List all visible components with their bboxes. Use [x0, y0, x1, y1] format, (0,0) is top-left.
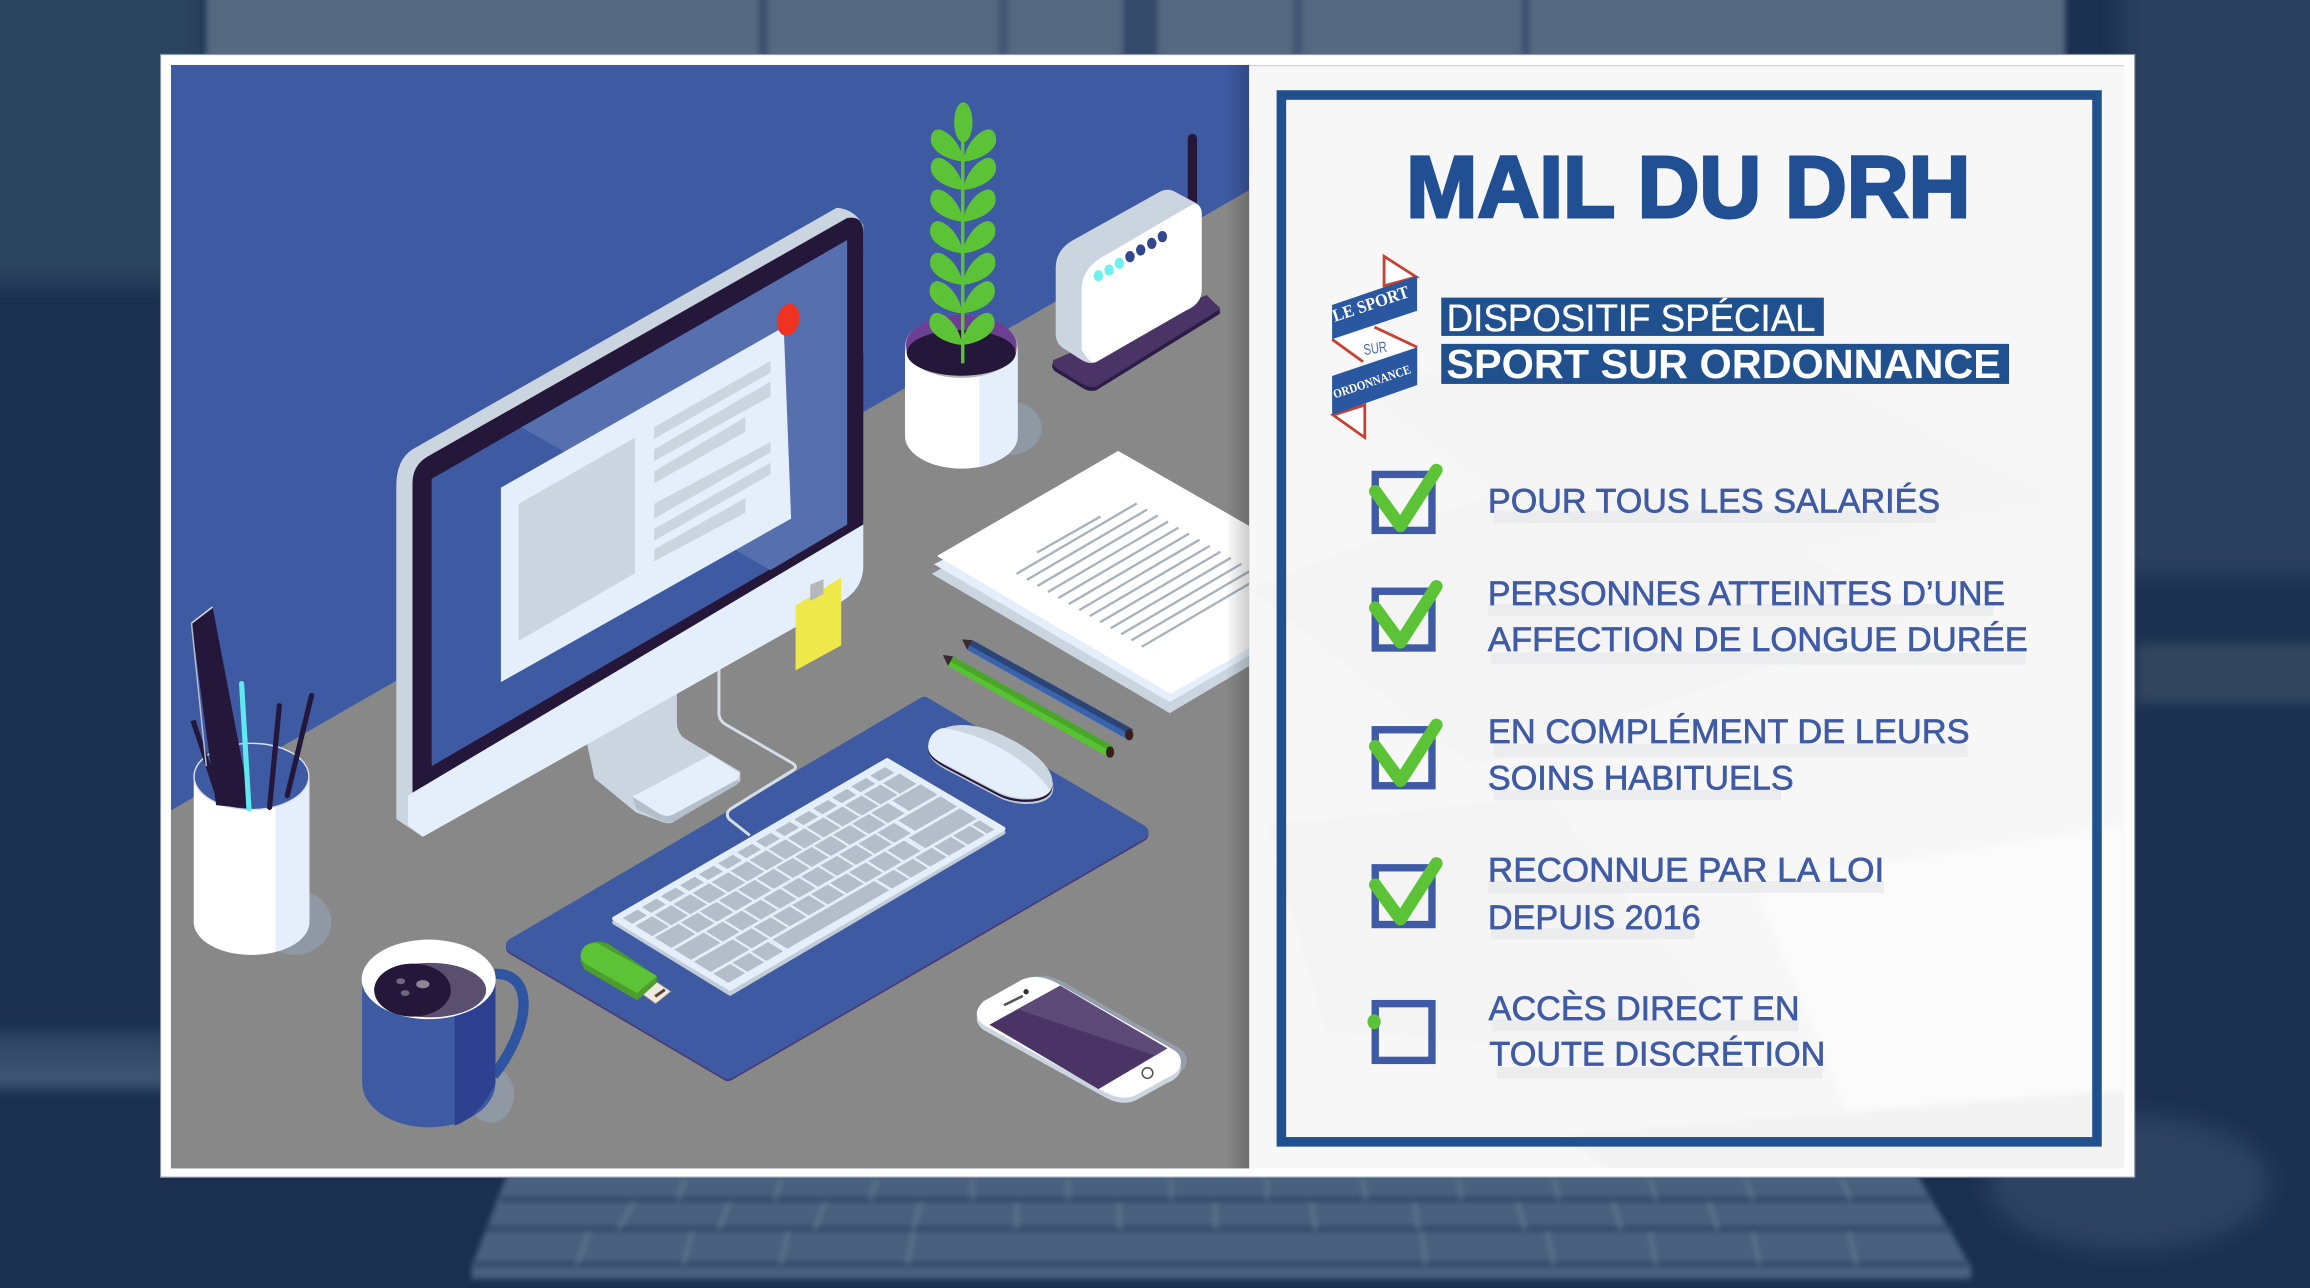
list item: personnes atteintes — [1375, 575, 2028, 664]
list item: personnes atteintes: PERSONNES ATTEINTES D’UNE — [1488, 575, 2005, 613]
monitor shell — [396, 208, 863, 837]
sticky note — [796, 578, 841, 670]
list item: en complément: EN COMPLÉMENT DE LEURS — [1488, 713, 1970, 751]
logo: le sport sur ordonnance ribbon: LE SPORT — [1330, 281, 1412, 326]
shadow cast by the paper — [1230, 65, 1250, 1168]
icon: pencils — [943, 639, 1133, 758]
list item: pour tous les salariés: POUR TOUS LES SALARIÉS — [1488, 483, 1940, 521]
icon: coffee mug — [362, 940, 524, 1127]
list item: accès direct: ACCÈS DIRECT EN — [1489, 990, 1800, 1028]
icon: desk mat — [513, 704, 1141, 1074]
list item: pour tous les salariés — [1375, 470, 1940, 530]
icon: computer monitor — [396, 208, 863, 837]
screen reflection — [522, 240, 847, 570]
icon: mouse — [928, 725, 1053, 804]
list item: accès direct: TOUTE DISCRÉTION — [1489, 1036, 1825, 1074]
icon: stack of papers — [932, 451, 1262, 713]
window on screen — [501, 302, 802, 682]
list item: accès direct — [1367, 990, 1825, 1078]
monitor bezel — [412, 218, 863, 793]
wall — [171, 65, 1249, 1168]
logo: le sport sur ordonnance ribbon — [1330, 256, 1417, 438]
white card — [161, 55, 2135, 1177]
screen — [432, 240, 847, 766]
icon: keyboard — [614, 760, 1003, 993]
panel: isometric desk illustration — [171, 65, 1262, 1168]
monitor stand — [588, 690, 740, 822]
list item: personnes atteintes: AFFECTION DE LONGUE DURÉE — [1488, 621, 2028, 659]
logo: le sport sur ordonnance ribbon: SUR — [1362, 339, 1388, 359]
icon: potted plant — [905, 102, 1042, 469]
list item: en complément — [1375, 713, 1970, 800]
panel: crumpled paper — [1249, 65, 2124, 1168]
icon: pen holder — [192, 607, 331, 955]
desk surface — [171, 190, 1249, 1168]
cable loop on mat — [727, 771, 793, 835]
cable — [718, 669, 797, 812]
list item: reconnue par la loi: RECONNUE PAR LA LOI — [1488, 852, 1884, 890]
list item: en complément: SOINS HABITUELS — [1488, 760, 1794, 798]
subtitle banner: sport sur ordonnance: SPORT SUR ORDONNANCE — [1446, 341, 2001, 387]
icon: smartphone — [977, 976, 1187, 1103]
subtitle banner: dispositif spécial: DISPOSITIF SPÉCIAL — [1447, 297, 1816, 340]
monitor chin — [408, 519, 863, 837]
list item: reconnue par la loi — [1375, 852, 1884, 939]
icon: router — [1052, 138, 1220, 391]
list item: reconnue par la loi: DEPUIS 2016 — [1488, 899, 1701, 937]
logo: le sport sur ordonnance ribbon: ORDONNANCE — [1331, 362, 1413, 401]
title: MAIL DU DRH — [1406, 138, 1970, 236]
panel frame: blue border — [1281, 95, 2097, 1142]
icon: USB key — [580, 942, 671, 1004]
